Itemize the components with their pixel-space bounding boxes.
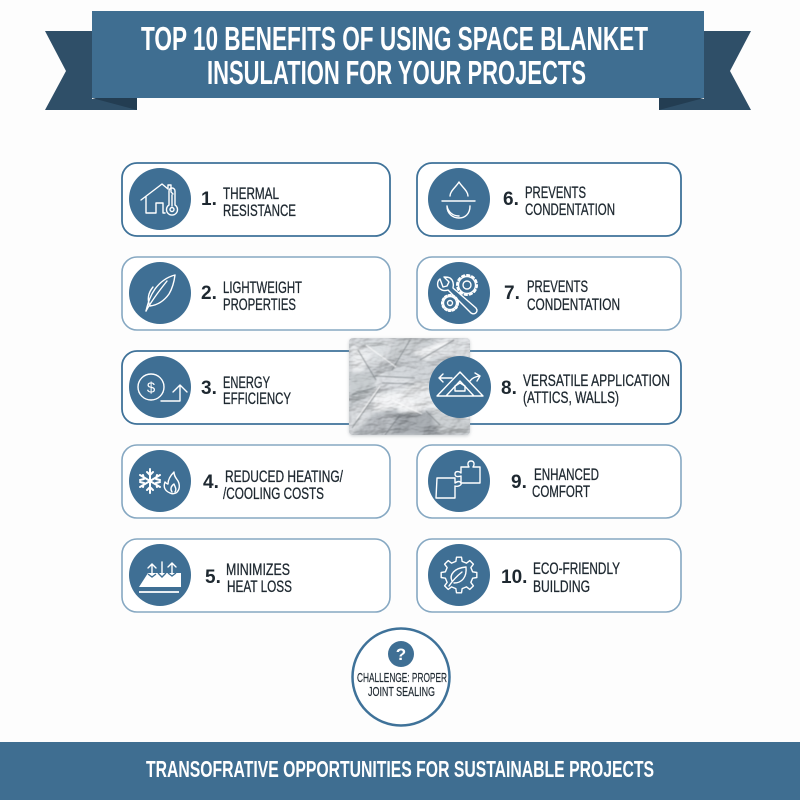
panel: benefit 3: ENERGY xyxy=(223,374,270,392)
panel: benefit 6 xyxy=(417,163,681,236)
panel: benefit 3: $ xyxy=(147,380,156,396)
image: crumpled foil sheet xyxy=(349,338,470,436)
icon: house and thermometer xyxy=(141,184,178,215)
panel: benefit 2: LIGHTWEIGHT xyxy=(223,279,302,297)
icon: gear with leaf xyxy=(441,557,477,593)
panel: benefit 6: PREVENTS xyxy=(525,184,586,202)
panel: benefit 5: HEAT LOSS xyxy=(227,578,292,596)
panel: benefit 6: 6. xyxy=(503,189,519,210)
panel: benefit 8 xyxy=(417,351,681,424)
banner face xyxy=(92,11,704,98)
panel: benefit 6: CONDENTATION xyxy=(525,201,615,219)
icon: snowflake and flame xyxy=(140,469,179,494)
panel: benefit 10: 10. xyxy=(501,567,527,588)
panel: benefit 7: PREVENTS xyxy=(527,278,588,296)
panel: benefit 1 xyxy=(122,163,390,236)
title text line 2: INSULATION FOR YOUR PROJECTS xyxy=(207,54,586,91)
panel: benefit 10: ECO-FRIENDLY xyxy=(533,560,620,578)
callout: challenge: JOINT SEALING xyxy=(368,684,435,699)
panel: benefit 3 xyxy=(122,351,390,424)
panel: benefit 2: 2. xyxy=(201,283,217,304)
panel: benefit 3: EFFICIENCY xyxy=(223,390,291,408)
panel: benefit 8: 8. xyxy=(501,378,517,399)
panel: benefit 2: PROPERTIES xyxy=(223,296,296,314)
panel: benefit 4: 4. xyxy=(203,472,219,493)
left ribbon tail xyxy=(45,31,137,110)
panel: benefit 5: 5. xyxy=(205,567,221,588)
icon: wrench and gears xyxy=(438,275,477,314)
panel: benefit 7: CONDENTATION xyxy=(527,296,620,314)
panel: benefit 2 xyxy=(122,257,390,330)
footer band xyxy=(0,742,800,800)
right ribbon tail xyxy=(659,31,751,110)
panel: benefit 10: BUILDING xyxy=(533,578,590,596)
icon: roof with arrows on panel 8 xyxy=(429,356,491,418)
panel: benefit 7: 7. xyxy=(504,283,520,304)
icon: feather xyxy=(146,275,175,311)
panel: benefit 3: 3. xyxy=(201,378,217,399)
panel: benefit 8: VERSATILE APPLICATION xyxy=(523,372,670,390)
panel: benefit 9 xyxy=(417,445,681,518)
icon: puzzle pieces xyxy=(436,461,480,498)
icon: question mark: ? xyxy=(396,645,406,664)
panel: benefit 7 xyxy=(417,257,681,330)
panel: benefit 1: RESISTANCE xyxy=(223,202,296,220)
icon: water drop xyxy=(442,182,475,218)
panel: benefit 4 xyxy=(122,445,390,518)
icon: dollar and arrow xyxy=(138,374,187,401)
panel: benefit 1: 1. xyxy=(201,189,217,210)
title banner xyxy=(45,11,751,110)
panel: benefit 4: REDUCED HEATING/ xyxy=(225,468,343,486)
panel: benefit 9: COMFORT xyxy=(532,483,590,501)
callout: challenge xyxy=(352,628,450,726)
panel: benefit 10 xyxy=(417,539,681,612)
panel: benefit 1: THERMAL xyxy=(223,185,279,203)
panel: benefit 5: MINIMIZES xyxy=(226,561,290,579)
callout: challenge: CHALLENGE: PROPER xyxy=(357,670,447,685)
icon: heat loss layer xyxy=(139,562,181,592)
panel: benefit 4: /COOLING COSTS xyxy=(223,485,324,503)
panel: benefit 5 xyxy=(122,539,390,612)
panel: benefit 8: (ATTICS, WALLS) xyxy=(523,389,619,407)
panel: benefit 9: ENHANCED xyxy=(534,466,599,484)
panel: benefit 9: 9. xyxy=(511,472,527,493)
